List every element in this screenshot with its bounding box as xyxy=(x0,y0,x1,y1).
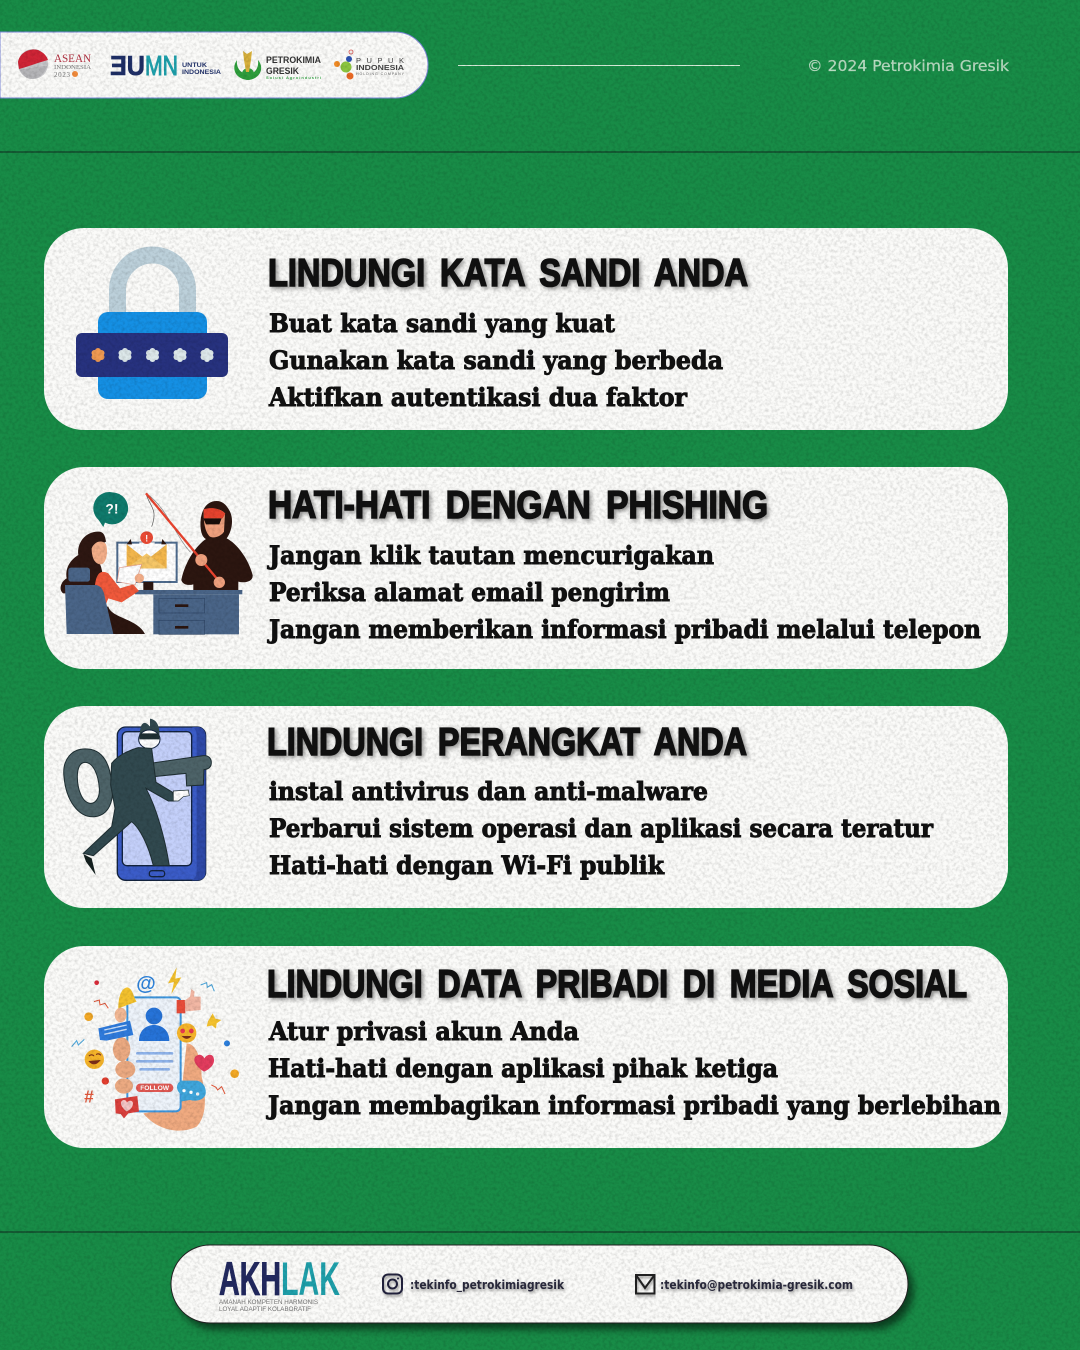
icon: phishing illustration xyxy=(61,492,253,634)
text block: tips: Jangan klik tautan mencurigakan xyxy=(267,541,714,571)
panel: perangkat xyxy=(44,706,1008,908)
logo: ASEAN Indonesia 2023 xyxy=(18,49,91,79)
logo: Petrokimia Gresik: PETROKIMIA xyxy=(266,55,321,65)
text block: tips: Gunakan kata sandi yang berbeda xyxy=(269,346,723,376)
logo: BUMN untuk Indonesia xyxy=(110,50,221,81)
icon: phishing illustration: ! xyxy=(145,533,148,543)
email address: :tekinfo@petrokimia-gresik.com xyxy=(660,1278,853,1292)
icon: social media phone in hand: FOLLOW xyxy=(140,1085,170,1092)
text block: tips: Aktifkan autentikasi dua faktor xyxy=(268,383,688,413)
logo: Pupuk Indonesia xyxy=(334,50,405,80)
icon: social media phone in hand: @ xyxy=(136,973,156,995)
text block: tips xyxy=(267,541,981,645)
footer pill xyxy=(171,1245,908,1323)
header logo pill xyxy=(0,32,428,98)
icon: padlock xyxy=(76,255,228,399)
logo: Pupuk Indonesia: INDONESIA xyxy=(356,63,405,72)
text block: tips: Periksa alamat email pengirim xyxy=(269,578,670,608)
logo: BUMN untuk Indonesia: INDONESIA xyxy=(182,69,221,76)
logo: Petrokimia Gresik: GRESIK xyxy=(266,66,299,76)
heading: HATI-HATI DENGAN PHISHING xyxy=(268,484,768,527)
logo: AKHLAK: AKH xyxy=(219,1252,281,1305)
logo: Pupuk Indonesia: HOLDING COMPANY xyxy=(356,72,405,76)
logo: BUMN untuk Indonesia: MN xyxy=(145,50,178,81)
logo: AKHLAK: AMANAH KOMPETEN HARMONIS xyxy=(219,1299,319,1306)
text block: tips xyxy=(268,309,723,413)
copyright text: © 2024 Petrokimia Gresik xyxy=(807,57,1009,75)
icon: thief with key and phone xyxy=(64,719,211,880)
text block: tips: Jangan memberikan informasi pribadi melalui telepon xyxy=(267,615,981,645)
heading: LINDUNGI PERANGKAT ANDA xyxy=(267,721,747,764)
text block: tips: Jangan membagikan informasi pribadi yang berlebihan xyxy=(266,1091,1001,1121)
text block: tips: Atur privasi akun Anda xyxy=(268,1017,579,1047)
icon: social media phone in hand: # xyxy=(84,1087,94,1107)
logo: Pupuk Indonesia: PUPUK xyxy=(356,56,404,65)
text block: tips: Hati-hati dengan aplikasi pihak ketiga xyxy=(268,1054,778,1084)
panel: kata sandi xyxy=(44,228,1008,430)
logo: BUMN untuk Indonesia: UNTUK xyxy=(182,62,207,69)
heading: LINDUNGI KATA SANDI ANDA xyxy=(268,252,748,295)
logo: AKHLAK: LAK xyxy=(281,1252,340,1305)
logo: ASEAN Indonesia 2023: INDONESIA xyxy=(54,64,91,71)
text block: tips: Buat kata sandi yang kuat xyxy=(269,309,615,339)
icon: instagram xyxy=(383,1274,402,1294)
logo: Petrokimia Gresik: Solusi Agroindustri xyxy=(266,75,321,80)
icon: social media phone in hand xyxy=(72,967,239,1131)
panel: media sosial xyxy=(44,946,1008,1148)
header divider line xyxy=(458,64,740,66)
logo: BUMN untuk Indonesia: ƎU xyxy=(110,50,145,81)
text block: tips xyxy=(266,1017,1001,1121)
panel: phishing xyxy=(44,467,1008,669)
logo: Petrokimia Gresik xyxy=(234,51,321,80)
icon: phishing illustration: ?! xyxy=(105,501,119,517)
text block: tips xyxy=(269,777,934,881)
logo: ASEAN Indonesia 2023: ASEAN xyxy=(54,51,91,65)
logo: AKHLAK: LOYAL ADAPTIF KOLABORATIF xyxy=(219,1306,311,1313)
text block: tips: instal antivirus dan anti-malware xyxy=(269,777,708,807)
text block: tips: Perbarui sistem operasi dan aplikasi secara teratur xyxy=(269,814,934,844)
text block: tips: Hati-hati dengan Wi-Fi publik xyxy=(269,851,665,881)
logo: ASEAN Indonesia 2023: 2023 xyxy=(54,71,70,79)
instagram handle: :tekinfo_petrokimiagresik xyxy=(410,1278,565,1293)
icon: email xyxy=(636,1275,654,1294)
